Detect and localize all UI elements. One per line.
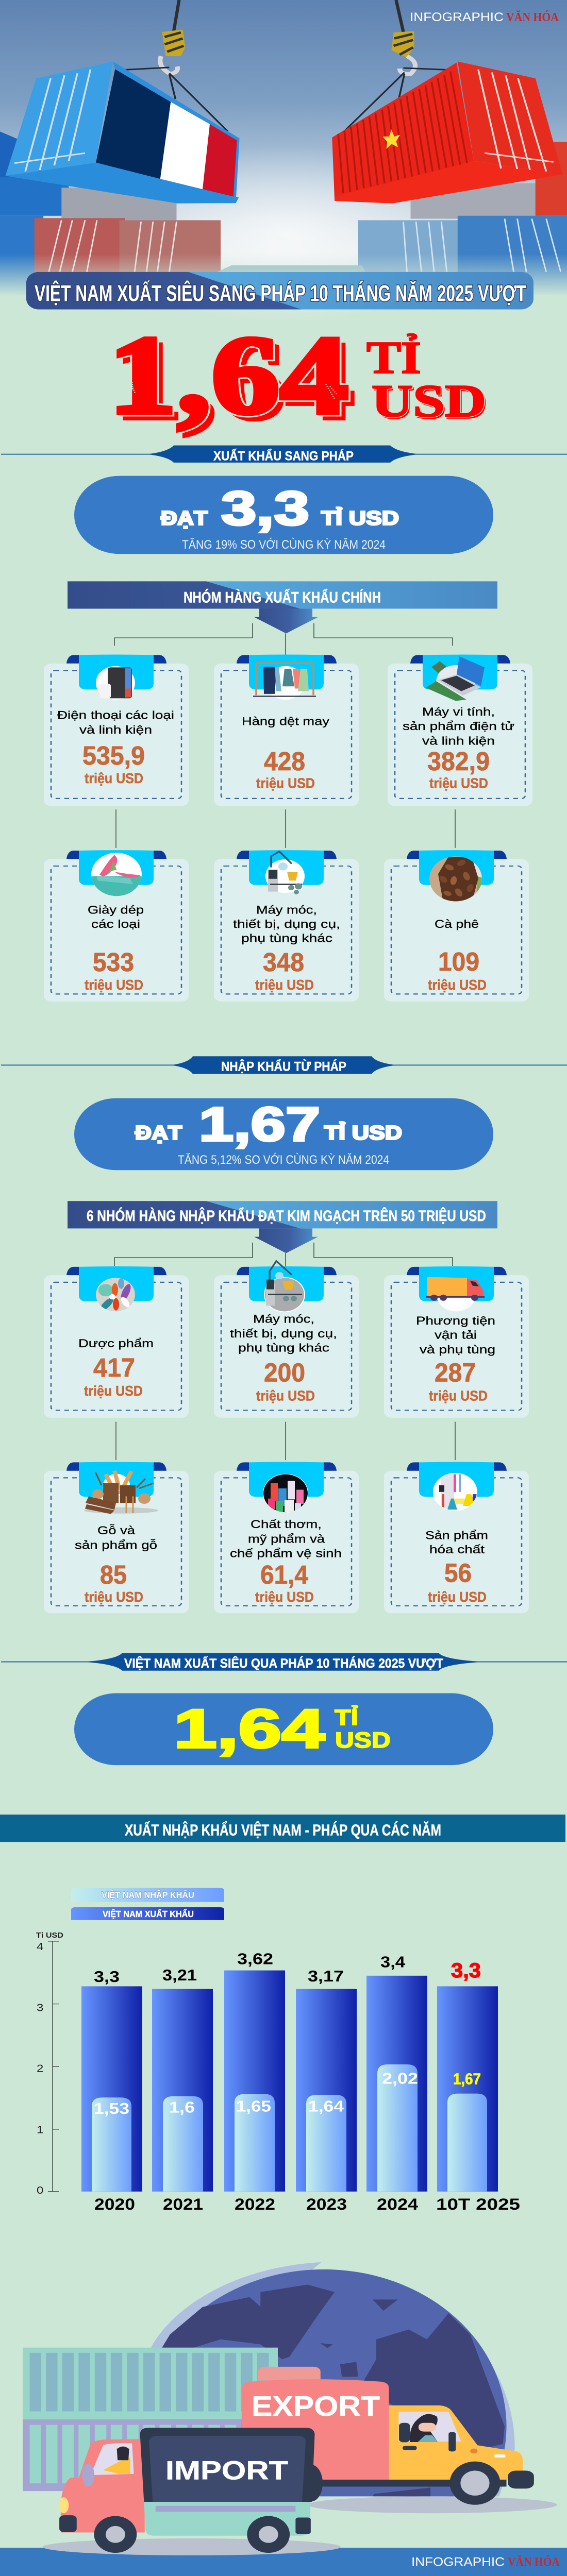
y axis: 4 (37, 1941, 43, 1953)
headline number 1,64 tỉ USD: USD (373, 377, 488, 428)
card: vehicles: Phương tiện (416, 1315, 495, 1328)
bars 2020: 3,3 (94, 1968, 120, 1986)
icon: coffee beans (429, 856, 485, 903)
background container stacks left (0, 131, 221, 296)
headline number 1,64 tỉ USD: USD (372, 376, 486, 426)
legend (71, 1888, 224, 1920)
icon: pills (96, 1278, 135, 1312)
section ribbon: xuất siêu: VIỆT NAM XUẤT SIÊU QUA PHÁP 10 THÁNG 2025 VƯỢT (124, 1656, 443, 1670)
card: machinery (214, 850, 359, 1002)
card: chemicals (384, 1462, 529, 1613)
year labels: 2022 (235, 2195, 275, 2213)
headline number 1,64 tỉ USD: USD (372, 376, 486, 426)
year labels: 2023 (306, 2195, 347, 2213)
crane rope and hook left (125, 0, 228, 131)
bars 10T 2025: 1,67 (453, 2071, 481, 2088)
card: machinery import: 200 (264, 1358, 305, 1387)
card: machinery: triệu USD (255, 977, 314, 993)
truck label: import: IMPORT (165, 2455, 288, 2485)
card: machinery: thiết bị, dụng cụ, (233, 918, 340, 930)
section ribbon: nhập khẩu từ Pháp: NHẬP KHẨU TỪ PHÁP (221, 1059, 346, 1074)
section ribbon: xuất khẩu sang Pháp (1, 445, 567, 463)
section ribbon: xuất khẩu sang Pháp: XUẤT KHẨU SANG PHÁP (213, 449, 354, 463)
card: cosmetics: chế phẩm vệ sinh (230, 1547, 342, 1560)
import truck (43, 2428, 341, 2555)
card: chemicals: 56 (444, 1558, 472, 1588)
card: textiles: Hàng dệt may (242, 715, 330, 728)
card: chemicals: hóa chất (429, 1544, 485, 1556)
card: wood: Gỗ và (97, 1524, 136, 1537)
card: textiles: 428 (264, 746, 305, 776)
icon: bottles (263, 1474, 308, 1513)
card: footwear (44, 850, 189, 1002)
card: vehicles: 287 (435, 1358, 476, 1387)
card: pharmaceuticals: triệu USD (84, 1383, 143, 1399)
card: vehicles: triệu USD (429, 1388, 488, 1404)
pill: export total: TỈ USD (321, 507, 399, 529)
title bar (26, 272, 533, 310)
bars 2020 (81, 1968, 142, 2192)
pill: import total: ĐẠT (135, 1122, 182, 1144)
card: machinery: Máy móc, (256, 904, 317, 917)
legend: VIỆT NAM XUẤT KHẨU (103, 1908, 194, 1919)
bar chart (36, 1931, 520, 2213)
background container stacks right (217, 142, 567, 296)
card: textiles (214, 655, 359, 806)
legend: VIỆT NAM NHẬP KHẨU (102, 1889, 194, 1901)
card: chemicals: Sản phẩm (425, 1529, 488, 1542)
headline number 1,64 tỉ USD (108, 313, 488, 443)
container: Vietnam flag (332, 61, 562, 204)
year labels: 2020 (94, 2195, 135, 2213)
chart heading (0, 1815, 565, 1842)
pill: export total: ĐẠT (161, 507, 208, 529)
pill: trade surplus (74, 1693, 493, 1765)
y axis: 1 (37, 2124, 43, 2136)
crane rope and hook right (345, 0, 447, 130)
footer band (0, 2548, 567, 2576)
pill: trade surplus: 1,64 (174, 1698, 325, 1759)
card: wood: 85 (100, 1560, 127, 1589)
year labels: 10T 2025 (436, 2195, 520, 2213)
banner: main export groups (68, 581, 497, 633)
card: footwear: các loại (91, 918, 140, 930)
card: pharmaceuticals: 417 (93, 1352, 135, 1382)
pill: export total (74, 476, 493, 554)
headline number 1,64 tỉ USD: 1,64 (108, 313, 348, 437)
logo bottom: INFOGRAPHIC (411, 2554, 505, 2569)
pill: import total: TĂNG 5,12% SO VỚI CÙNG KỲ NĂM 2024 (178, 1153, 389, 1167)
icon: machine in circle (264, 1261, 305, 1312)
card: phones: và linh kiện (79, 724, 152, 736)
connector lines import (114, 1243, 455, 1460)
bars 10T 2025: 3,3 (451, 1959, 481, 1982)
bars 2024 (366, 1954, 427, 2192)
icon: clothes rack (253, 663, 316, 700)
pill: export total: 3,3 (221, 482, 309, 535)
container stack (23, 2348, 278, 2491)
card: machinery: 348 (263, 947, 304, 977)
card: phones (44, 655, 189, 806)
card: machinery import: thiết bị, dụng cụ, (230, 1328, 337, 1340)
bars 2022: 3,62 (237, 1951, 273, 1968)
card: cosmetics: triệu USD (255, 1589, 314, 1605)
card: cosmetics: 61,4 (260, 1560, 308, 1589)
headline number 1,64 tỉ USD: TỈ (366, 332, 421, 383)
y axis (36, 1931, 63, 2196)
year labels: 2021 (163, 2195, 203, 2213)
card: coffee (384, 850, 529, 1002)
banner: six import groups (68, 1201, 497, 1253)
section ribbon: xuất siêu (1, 1653, 567, 1671)
hero photo: containers with flags (0, 0, 567, 322)
bars 2021: 1,6 (169, 2099, 195, 2116)
icon: phone (96, 666, 135, 700)
y axis: 2 (37, 2062, 43, 2074)
section ribbon: nhập khẩu từ Pháp (1, 1056, 567, 1074)
card: wood: sản phẩm gỗ (75, 1539, 157, 1552)
card: cosmetics (214, 1462, 359, 1613)
card: chemicals: triệu USD (428, 1589, 487, 1605)
truck label: export: EXPORT (252, 2390, 380, 2422)
pill: export total: TĂNG 19% SO VỚI CÙNG KỲ NĂM 2024 (182, 537, 386, 551)
card: footwear: Giày dép (88, 904, 144, 917)
icon: truck (426, 1277, 485, 1311)
logo top (410, 10, 559, 24)
card: pharmaceuticals (44, 1266, 189, 1418)
icon: lab flasks (433, 1473, 478, 1511)
bars 2021: 3,21 (162, 1967, 197, 1985)
bars 2023: 3,17 (308, 1968, 344, 1985)
bars 2022 (224, 1951, 285, 2192)
pill: trade surplus: TỈ (335, 1705, 358, 1730)
card: cosmetics: mỹ phẩm và (248, 1533, 325, 1546)
card: coffee: Cà phê (435, 918, 479, 930)
card: footwear: triệu USD (85, 977, 143, 993)
icon: shoes on box (91, 853, 142, 897)
connector lines export (114, 623, 455, 848)
card: phones: 535,9 (82, 740, 145, 770)
banner: main export groups: NHÓM HÀNG XUẤT KHẨU CHÍNH (184, 588, 381, 606)
bars 10T 2025 (437, 1959, 498, 2192)
pill: trade surplus: USD (335, 1727, 391, 1752)
headline number 1,64 tỉ USD: 1,64 (108, 313, 348, 437)
year labels: 2024 (377, 2195, 418, 2213)
icon: laptop and circuit board (426, 656, 485, 701)
y axis: Tỉ USD (36, 1931, 63, 1940)
card: computers: và linh kiện (422, 735, 495, 748)
card: vehicles (384, 1266, 529, 1418)
pill: import total: TỈ USD (324, 1122, 402, 1144)
card: phones: triệu USD (85, 771, 143, 786)
card: textiles: triệu USD (256, 775, 315, 791)
globe (141, 2262, 515, 2496)
card: vehicles: vận tải (435, 1329, 477, 1342)
card: footwear: 533 (93, 947, 134, 977)
logo bottom (411, 2554, 560, 2569)
bars 2024: 3,4 (380, 1954, 405, 1971)
pill: import total: 1,67 (199, 1098, 320, 1151)
bars 2020: 1,53 (94, 2100, 129, 2117)
card: machinery import: Máy móc, (253, 1313, 314, 1326)
export truck (242, 2367, 557, 2513)
card: wood: triệu USD (85, 1589, 143, 1605)
pill: import total (74, 1098, 493, 1170)
year labels (94, 2195, 520, 2213)
illustration: globe, containers and trucks (23, 2262, 557, 2555)
card: computers: 382,9 (427, 746, 490, 776)
card: computers: sản phẩm điện tử (403, 720, 514, 733)
y axis: 3 (37, 2002, 43, 2013)
card: machinery import: phụ tùng khác (238, 1342, 329, 1354)
card: computers (388, 655, 532, 806)
card: wood (44, 1462, 189, 1613)
y axis: 0 (37, 2184, 43, 2196)
card: machinery import: triệu USD (256, 1388, 315, 1404)
card: vehicles: và phụ tùng (420, 1343, 495, 1356)
card: coffee: triệu USD (428, 977, 487, 993)
card: phones: Điện thoại các loại (57, 709, 174, 722)
container: France flag (6, 61, 240, 204)
hero fade (0, 254, 567, 296)
card: computers: triệu USD (429, 775, 488, 791)
logo top: INFOGRAPHIC (410, 10, 504, 24)
card: cosmetics: Chất thơm, (251, 1518, 322, 1531)
bars 2023 (296, 1968, 357, 2192)
bars 2024: 2,02 (382, 2070, 418, 2088)
card: pharmaceuticals: Dược phẩm (78, 1337, 154, 1350)
bars 2022: 1,65 (236, 2098, 271, 2115)
card: machinery: phụ tùng khác (241, 932, 332, 945)
bars 2021 (152, 1967, 213, 2192)
bars 2023: 1,64 (308, 2098, 344, 2115)
card: coffee: 109 (438, 946, 479, 976)
icon: logs and stumps (84, 1471, 158, 1514)
card: machinery import (214, 1261, 359, 1418)
icon: industrial machine (265, 852, 305, 894)
card: computers: Máy vi tính, (422, 705, 495, 718)
headline number 1,64 tỉ USD: 1,64 (114, 319, 355, 443)
